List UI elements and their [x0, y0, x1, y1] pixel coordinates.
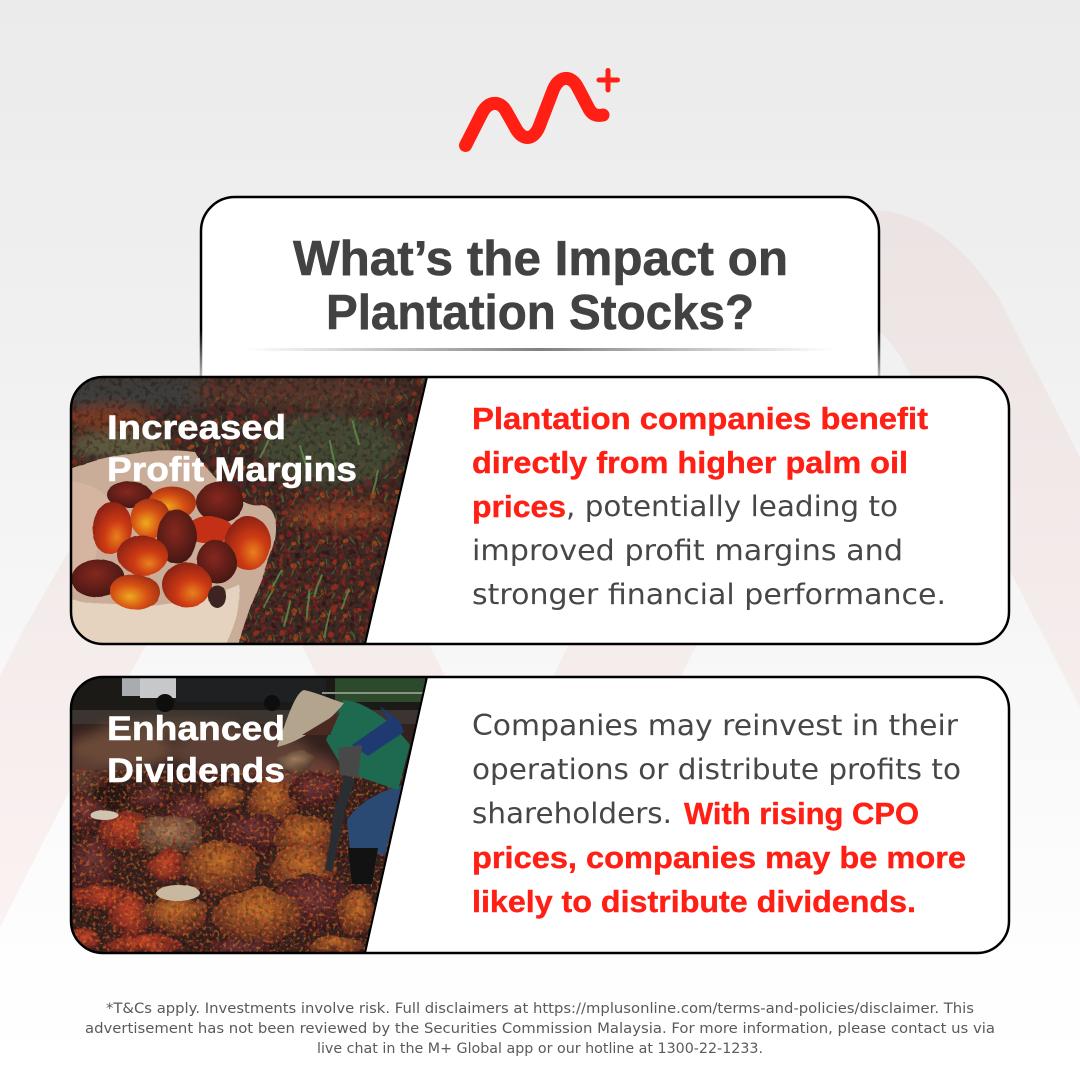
- text block: companies may reinvest: operations or distribute profits to: [472, 753, 961, 786]
- label: enhanced dividends: [107, 710, 285, 790]
- title: [293, 232, 788, 340]
- card outline: [71, 377, 1009, 644]
- text block: companies may reinvest: Companies may reinvest in their: [472, 709, 958, 742]
- text block: companies may reinvest: With rising CPO: [684, 796, 919, 831]
- footer disclaimer: *T&Cs apply. Investments involve risk. Full disclaimers at https://mplusonline.com/terms-and-policies/disclaimer. This: [106, 1001, 974, 1017]
- title: Plantation Stocks?: [326, 286, 754, 340]
- fruit bunches: [62, 749, 378, 957]
- text block: plantation companies benefit: [472, 401, 946, 611]
- text block: companies may reinvest: shareholders.: [472, 797, 672, 830]
- panel: title card: [201, 197, 879, 376]
- panel: increased profit margins: [60, 376, 1009, 655]
- footer disclaimer: advertisement has not been reviewed by the Securities Commission Malaysia. For more information, please contact us via: [85, 1021, 995, 1037]
- text block: plantation companies benefit: Plantation companies benefit: [472, 401, 928, 436]
- text block: companies may reinvest: prices, companies may be more: [472, 840, 966, 875]
- text block: plantation companies benefit: , potentially leading to: [566, 490, 898, 523]
- label: increased profit margins: Profit Margins: [107, 451, 357, 489]
- fruits: [71, 482, 271, 610]
- title: What’s the Impact on: [293, 232, 788, 286]
- text block: companies may reinvest: likely to distribute dividends.: [472, 884, 916, 919]
- background watermark: large M+ wave: [0, 267, 1080, 900]
- label: enhanced dividends: Dividends: [107, 752, 285, 790]
- hand: [72, 450, 276, 643]
- photo: palm fruit in hand: [60, 376, 430, 655]
- panel: enhanced dividends: [60, 676, 1009, 957]
- footer disclaimer: [85, 1001, 995, 1057]
- label: enhanced dividends: Enhanced: [107, 710, 285, 748]
- text block: companies may reinvest: [472, 709, 966, 919]
- worker: [277, 690, 410, 884]
- photo: worker on palm fruit bunches: [60, 676, 430, 957]
- truck: [122, 678, 427, 712]
- label: increased profit margins: Increased: [107, 409, 286, 447]
- card outline: [71, 677, 1009, 953]
- text block: plantation companies benefit: directly from higher palm oil: [472, 445, 908, 480]
- footer disclaimer: live chat in the M+ Global app or our hotline at 1300-22-1233.: [317, 1041, 763, 1057]
- text block: plantation companies benefit: improved profit margins and: [472, 534, 903, 567]
- logo: M+: [466, 70, 618, 146]
- text block: plantation companies benefit: stronger financial performance.: [472, 578, 946, 611]
- text block: plantation companies benefit: prices: [472, 489, 566, 524]
- label: increased profit margins: [107, 409, 357, 489]
